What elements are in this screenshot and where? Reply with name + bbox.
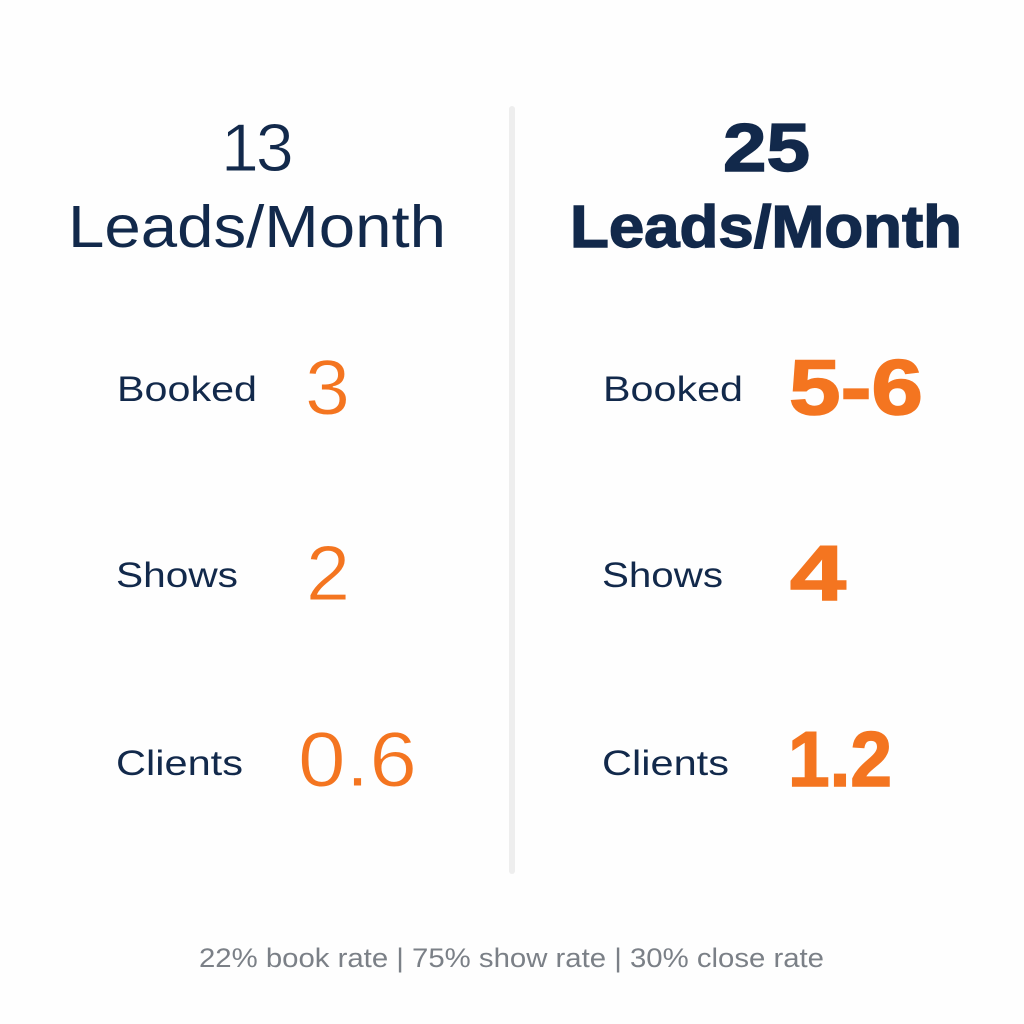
row: shows 2: 2 [306,529,350,617]
row: clients 0.6 [116,715,417,803]
heading: 13 leads per month: 13 [221,110,291,186]
heading: 13 leads per month [68,110,446,260]
heading: 25 leads per month [570,110,962,260]
center divider [509,106,515,874]
row: booked 5-6 [603,343,923,431]
row: shows 4: 4 [790,529,846,617]
heading: 25 leads per month: 25 [723,110,810,186]
row: booked 5-6: 5-6 [789,343,923,431]
panel: 13 leads per month [68,110,446,803]
row: booked 3 [117,343,350,431]
row: booked 5-6: Booked [603,370,743,409]
row: shows 4 [602,529,846,617]
row: clients 1.2 [602,715,892,803]
heading: 13 leads per month: Leads/Month [68,194,446,260]
row: shows 2: Shows [116,556,238,595]
heading: 25 leads per month: Leads/Month [570,194,962,260]
row: booked 3: 3 [305,343,350,431]
row: clients 1.2: 1.2 [788,715,892,803]
footnote: rates: 22% book rate | 75% show rate | 30% close rate [199,943,824,973]
row: shows 4: Shows [602,556,723,595]
row: shows 2 [116,529,350,617]
row: booked 3: Booked [117,370,257,409]
row: clients 1.2: Clients [602,744,729,783]
row: clients 0.6: 0.6 [298,715,417,803]
panel: 25 leads per month [570,110,962,803]
row: clients 0.6: Clients [116,744,243,783]
